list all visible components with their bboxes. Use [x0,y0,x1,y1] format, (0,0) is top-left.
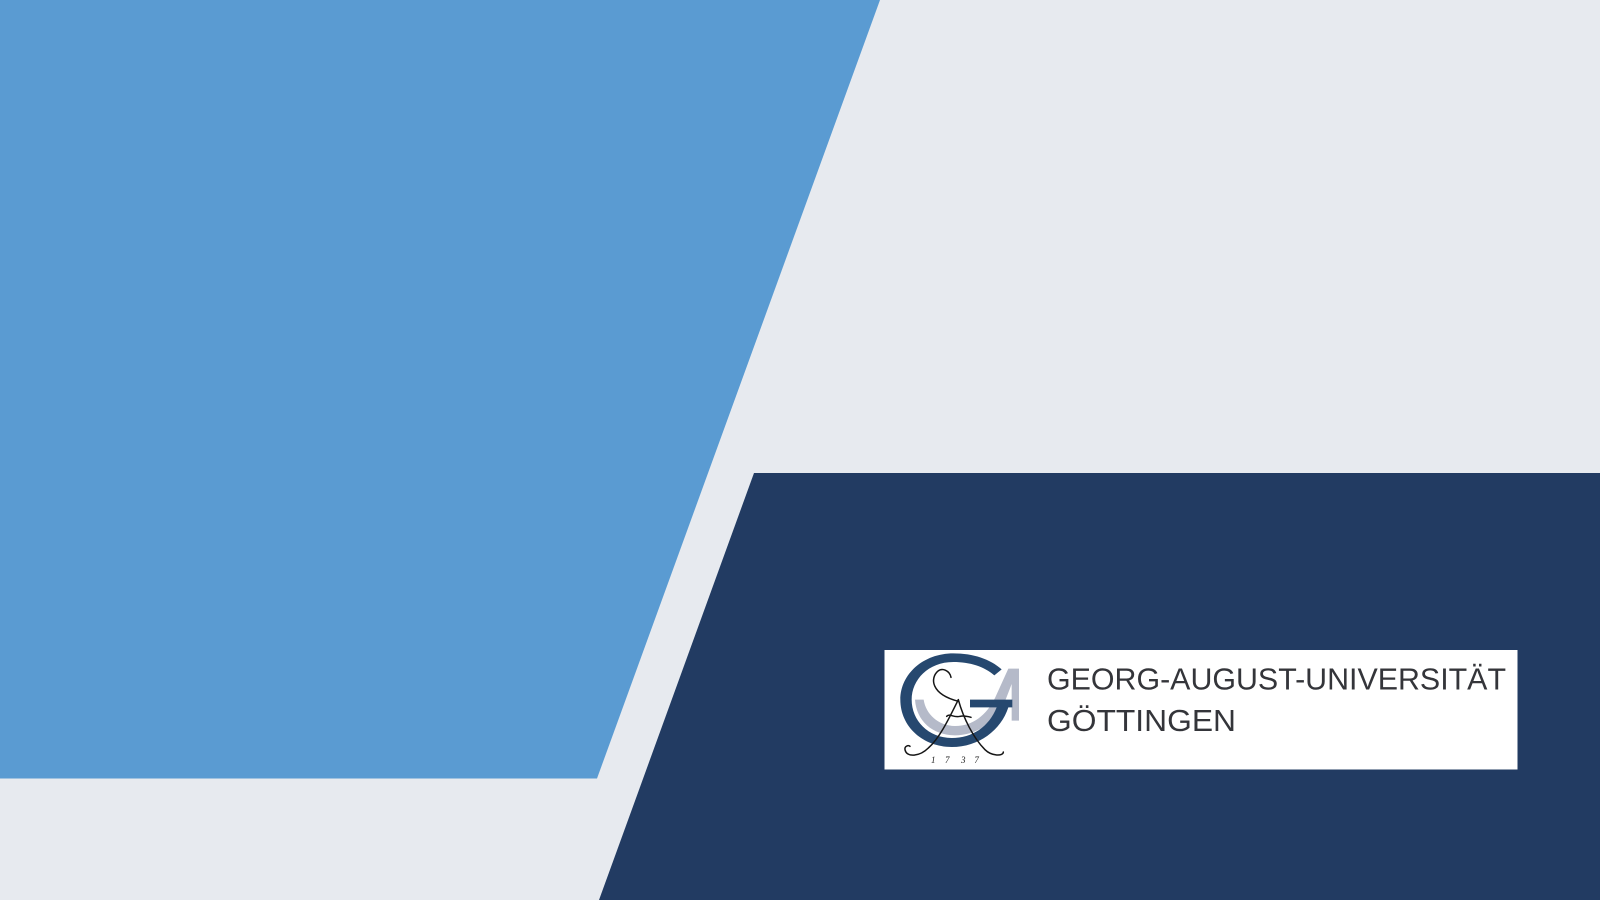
monogram script initials [905,670,1003,755]
monogram navy letter G [900,653,1012,747]
name line one: GEORG-AUGUST-UNIVERSITÄT [1047,662,1506,696]
icon: university GA monogram [900,653,1019,765]
founding year: 3 [960,755,966,765]
panel: light blue parallelogram [0,0,880,778]
logo background [884,650,1518,770]
founding year: 7 [974,755,979,765]
monogram grey letter A [915,669,1019,735]
founding year: 1 [931,755,935,765]
logo banner [884,650,1518,770]
panel: navy block [599,473,1600,900]
university name [1047,662,1506,738]
name line two: GÖTTINGEN [1047,703,1236,738]
founding year: 7 [945,755,950,765]
